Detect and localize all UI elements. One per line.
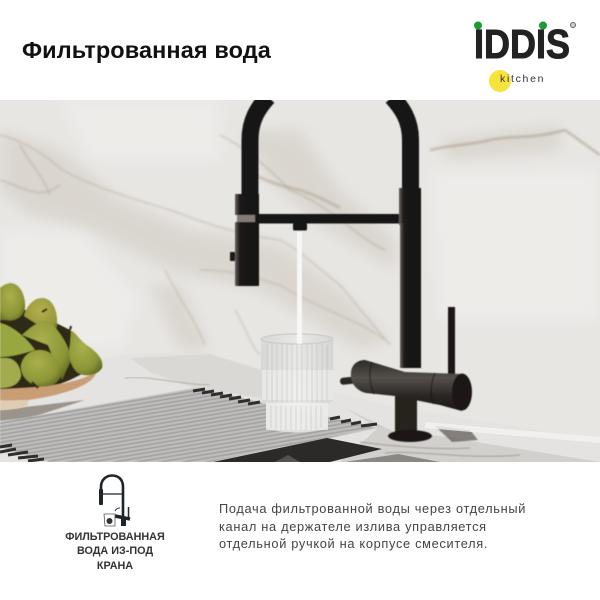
logo: iddis kitchen: kitchen	[500, 73, 545, 85]
icon caption	[65, 531, 165, 572]
faucet	[230, 97, 472, 442]
pears in a wooden bowl	[0, 283, 102, 410]
icon caption: ФИЛЬТРОВАННАЯ	[65, 531, 165, 543]
marble clouding	[0, 125, 560, 350]
marble veins	[0, 130, 600, 355]
photo: kitchen faucet filling a glass	[0, 100, 600, 510]
title: Фильтрованная вода	[22, 37, 271, 63]
icon caption: ВОДА ИЗ-ПОД	[77, 545, 153, 557]
description text: отдельной ручкой на корпусе смесителя.	[219, 536, 488, 551]
water stream	[297, 232, 302, 344]
description text	[219, 501, 526, 551]
logo: iddis kitchen: IDDIS	[474, 21, 570, 67]
description text: Подача фильтрованной воды через отдельный	[219, 501, 526, 516]
glass with water	[261, 334, 334, 432]
logo: iddis kitchen	[474, 21, 576, 92]
icon caption: КРАНА	[97, 560, 133, 572]
drying rack	[0, 388, 440, 462]
description text: канал на держателе излива управляется	[219, 518, 487, 534]
countertop marble	[0, 352, 600, 462]
icon: faucet with glass	[99, 474, 130, 526]
